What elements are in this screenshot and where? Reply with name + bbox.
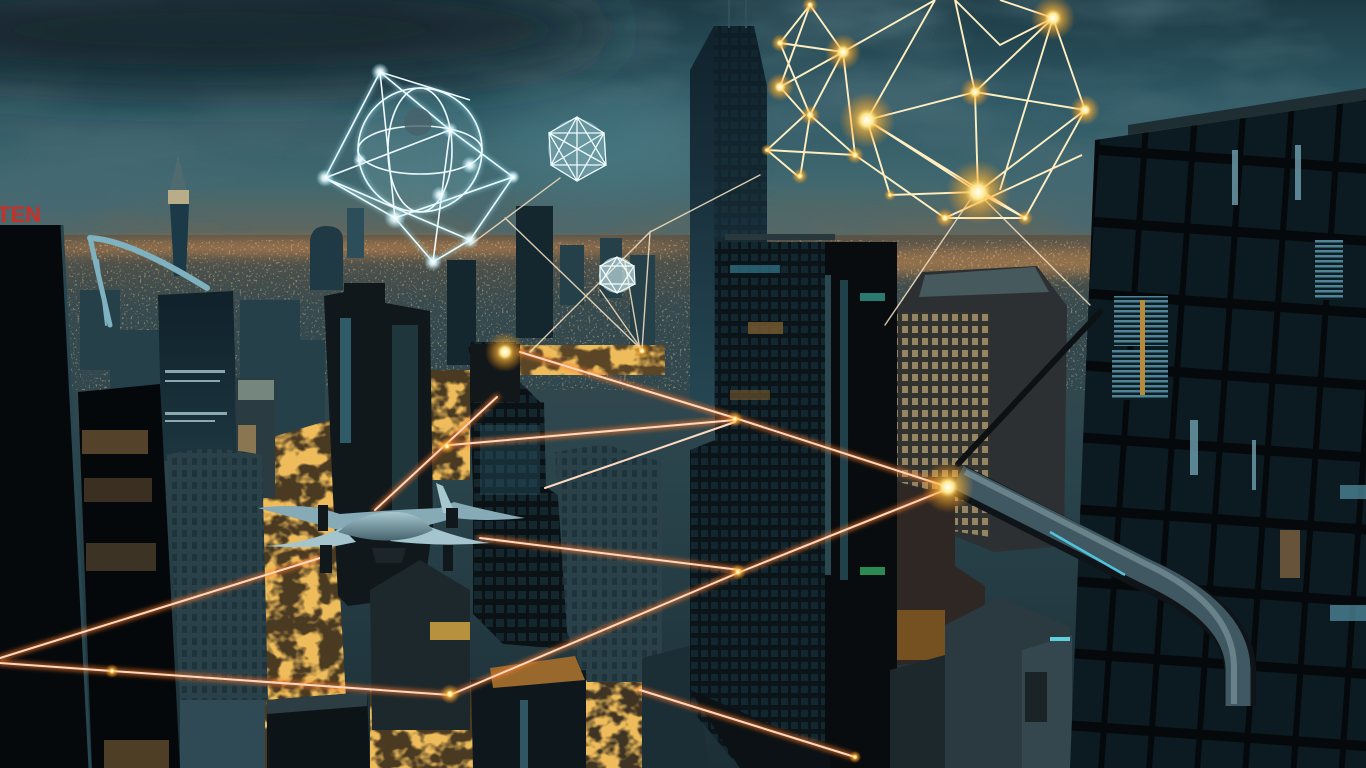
- tower: bottom blue: [642, 646, 710, 768]
- antenna: [958, 312, 1100, 464]
- distant skyline towers: [80, 155, 655, 470]
- crane arm: [90, 238, 207, 325]
- tower: central dark: [324, 283, 433, 606]
- sky with storm clouds: [0, 0, 1366, 270]
- drone: [258, 483, 525, 573]
- laser glow halo: [0, 352, 945, 757]
- small polyhedron lower: [599, 257, 635, 293]
- tower: small lit block: [235, 378, 275, 498]
- laser core lines: [0, 352, 945, 757]
- tower: laser-topped dark: [468, 342, 571, 649]
- white neural globe: [316, 63, 520, 271]
- tower: tall blue spire: [690, 0, 767, 406]
- conduit pipe: [958, 472, 1240, 706]
- tower: grey lower left: [167, 449, 268, 768]
- laser flares: [105, 332, 974, 763]
- distant city haze: [0, 235, 1366, 768]
- tower: large central: [690, 234, 897, 768]
- tower: grey bottom right: [890, 597, 1072, 768]
- tower: mid-left blue: [158, 291, 238, 461]
- upper thin beams: [470, 175, 1090, 352]
- tower: warm window block: [895, 266, 1067, 552]
- laser network: [0, 175, 1090, 757]
- city streets with orange light: [262, 345, 665, 768]
- golden network: [761, 0, 1100, 228]
- tower: left window block: [78, 384, 180, 768]
- tower: grey centre right: [555, 444, 662, 682]
- globe glow: [325, 72, 513, 262]
- tower: brown lower behind pipe: [890, 480, 985, 666]
- tower: bottom left low: [267, 692, 370, 768]
- tower: far left: [0, 225, 90, 768]
- small polyhedron upper: [548, 117, 606, 181]
- tower: right foreground: [1070, 88, 1366, 768]
- tower: low foreground block: [370, 560, 470, 730]
- tower: small gold roof bottom centre: [471, 656, 586, 768]
